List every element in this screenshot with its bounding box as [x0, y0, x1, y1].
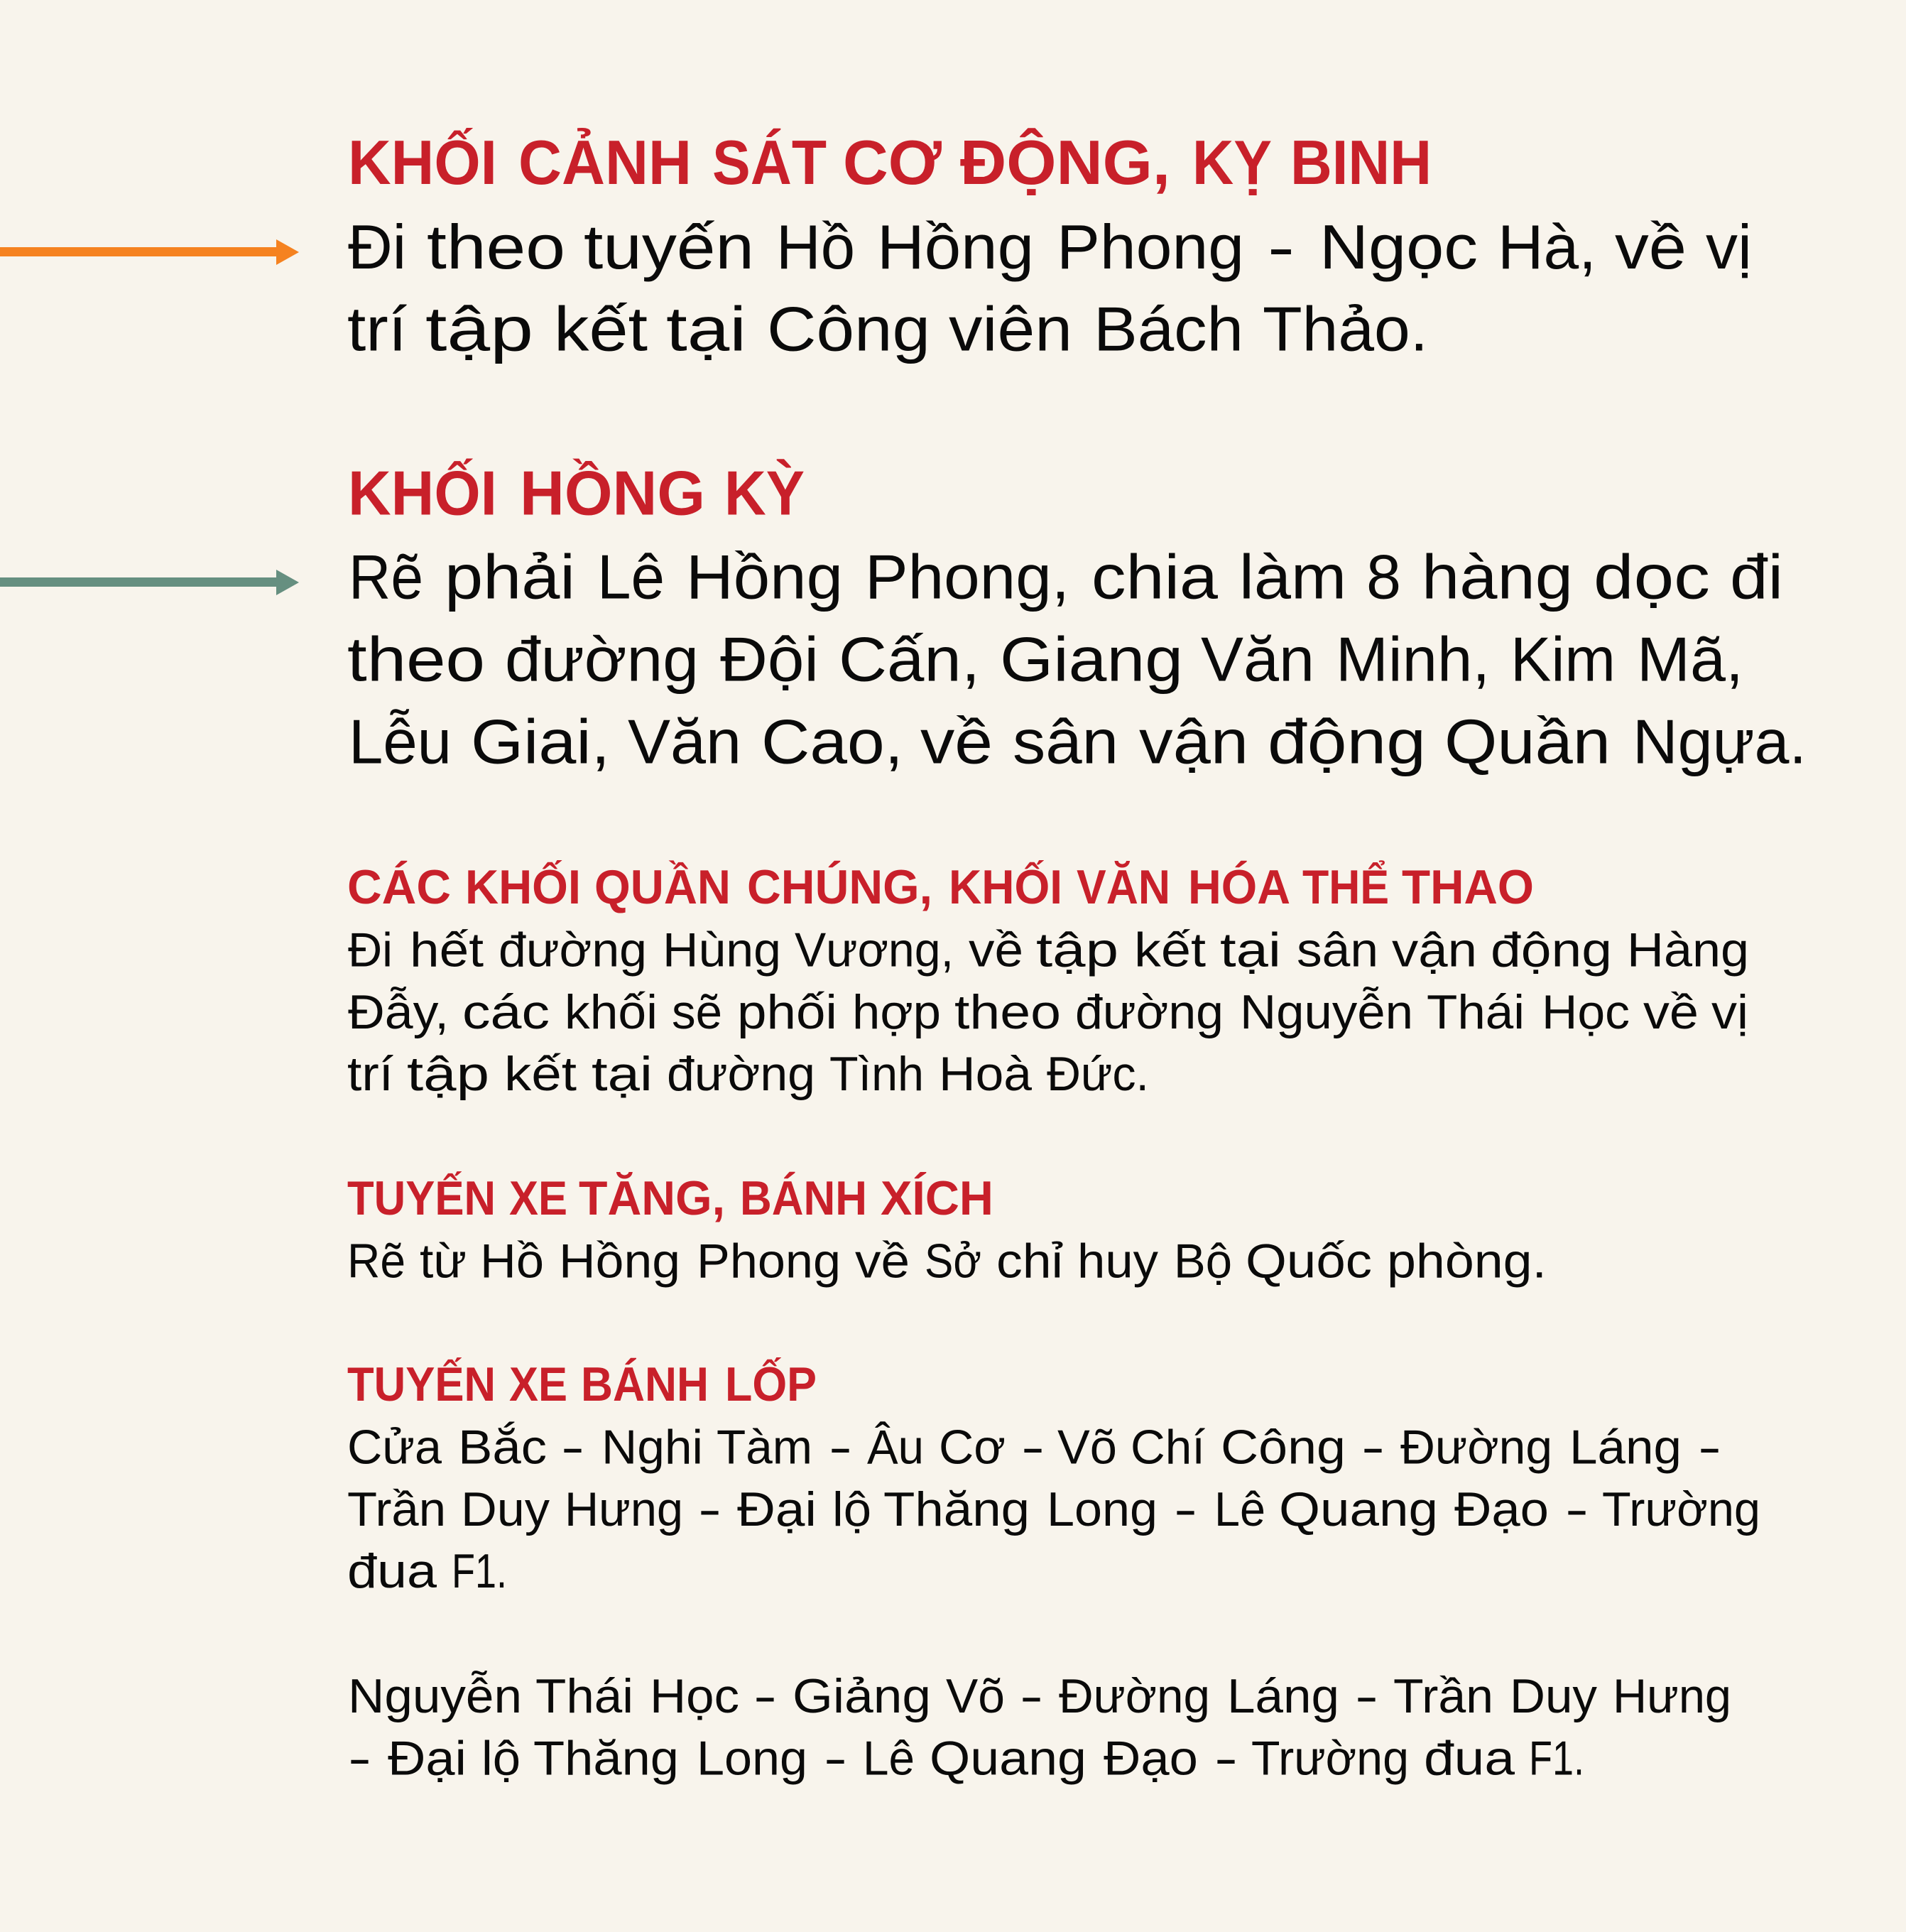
- body line 1: đường: [499, 923, 647, 977]
- body line 1: hết: [410, 923, 484, 977]
- text block: Tuyến xe tăng, bánh xích: [347, 1171, 1547, 1288]
- heading: Các khối quần chúng: THỂ: [1302, 859, 1389, 914]
- route 1 line 3: F1.: [452, 1544, 507, 1598]
- route 1 line 1: -: [1698, 1421, 1721, 1475]
- body line 1: phải: [445, 541, 575, 612]
- route 2 line 2: -: [824, 1732, 847, 1786]
- heading: Các khối quần chúng: QUẦN: [594, 859, 731, 914]
- heading: Khối Cảnh sát cơ động: BINH: [1290, 127, 1432, 197]
- body line 1: Đi: [348, 923, 393, 977]
- body line 2: viên: [949, 294, 1072, 364]
- body line 3: động: [1268, 706, 1426, 777]
- heading: Khối Cảnh sát cơ động: CƠ: [843, 127, 942, 197]
- body line 1: Hồng: [686, 541, 843, 612]
- body line: về: [855, 1234, 910, 1288]
- body line 1: về: [1615, 212, 1687, 282]
- body line 3: [347, 1047, 1149, 1101]
- route 1 line 2: Lê: [1214, 1482, 1265, 1536]
- route 2 line 2: Long: [697, 1732, 807, 1786]
- route 1 line 2: Hưng: [565, 1482, 683, 1536]
- body line 3: về: [920, 706, 993, 777]
- route 1 line 1: -: [1021, 1421, 1045, 1475]
- body line: Rẽ: [347, 1234, 405, 1288]
- body line 1: Hùng: [663, 923, 781, 977]
- heading: Khối Hồng kỳ: [348, 457, 805, 528]
- body line 1: Hồng: [877, 212, 1034, 282]
- route 1 line 2: Duy: [461, 1482, 550, 1536]
- route 1 line 1: Nghi: [601, 1421, 703, 1475]
- body line 3: Lễu: [349, 706, 452, 777]
- body line 2: Kim: [1510, 624, 1616, 695]
- heading: Các khối quần chúng: KHỐI: [465, 859, 581, 914]
- route 2 line 2: Thăng: [533, 1732, 679, 1786]
- body line 2: phối: [737, 985, 837, 1039]
- body line 3: kết: [504, 1047, 577, 1101]
- body line 1: tại: [1220, 923, 1281, 977]
- body line 2: Mã,: [1637, 624, 1743, 695]
- body line 2: theo: [347, 624, 485, 695]
- route 1 line 2: -: [1565, 1482, 1589, 1536]
- body line 1: kết: [1134, 923, 1206, 977]
- route 2 line 2: -: [1214, 1732, 1238, 1786]
- body line 3: Cao,: [761, 706, 903, 777]
- text block: Khối Hồng kỳ: [347, 457, 1807, 777]
- route 1 line 1: -: [1361, 1421, 1385, 1475]
- route 2 line 1: [348, 1669, 1731, 1723]
- body line 2: về: [1643, 985, 1699, 1039]
- body line 2: hợp: [852, 985, 941, 1039]
- route 1 line 2: Trần: [347, 1482, 446, 1536]
- body line 2: [347, 624, 1743, 695]
- body line: huy: [1077, 1234, 1158, 1288]
- heading: Khối Cảnh sát cơ động: KHỐI: [348, 127, 497, 197]
- body line 1: Hàng: [1627, 923, 1749, 977]
- route 1 line 1: [347, 1421, 1721, 1475]
- route 1 line 1: Bắc: [458, 1421, 547, 1475]
- heading: Các khối quần chúng: VĂN: [1077, 860, 1170, 914]
- heading: Các khối quần chúng: CHÚNG,: [747, 860, 932, 914]
- body line 1: làm: [1239, 541, 1346, 612]
- heading: Khối Cảnh sát cơ động: SÁT: [712, 127, 827, 197]
- body line 3: vận: [1139, 706, 1248, 777]
- body line 2: Văn: [1201, 624, 1314, 695]
- body line 3: Đức.: [1047, 1047, 1149, 1101]
- body line 1: dọc: [1594, 541, 1710, 612]
- body line 1: theo: [427, 212, 565, 282]
- body line 1: đi: [1730, 541, 1783, 612]
- body line 3: Quần: [1444, 706, 1611, 777]
- body line 2: đường: [1075, 985, 1224, 1039]
- body line 3: Ngựa.: [1633, 706, 1807, 777]
- route 1 line 1: -: [829, 1421, 852, 1475]
- body line 1: hàng: [1422, 541, 1573, 612]
- body line 1: [349, 541, 1783, 612]
- route 1 line 2: Đạo: [1454, 1482, 1549, 1536]
- route 1 line 1: Đường: [1400, 1421, 1552, 1475]
- body line 1: [348, 923, 1749, 977]
- body line 2: tại: [666, 294, 746, 364]
- body line: Hồng: [559, 1234, 680, 1288]
- route 2 line 1: Hưng: [1613, 1669, 1731, 1723]
- heading: Các khối quần chúng: KHỐI: [949, 859, 1062, 914]
- heading: Các khối quần chúng: HÓA: [1188, 860, 1290, 914]
- body line 1: Hồ: [776, 212, 855, 282]
- body line 1: Vương,: [795, 923, 954, 977]
- route 1 line 3: đua: [347, 1544, 437, 1598]
- route 1 line 1: Võ: [1057, 1421, 1117, 1475]
- body line 2: Học: [1542, 985, 1630, 1039]
- heading: Khối Hồng kỳ: HỒNG: [520, 457, 705, 528]
- route 1 line 2: Thăng: [883, 1482, 1030, 1536]
- body line: Quốc: [1246, 1234, 1372, 1288]
- body line 2: Giang: [1000, 624, 1183, 695]
- route 2 line 1: Học: [650, 1669, 739, 1723]
- route 2 line 2: [348, 1732, 1584, 1786]
- route 2 line 2: Lê: [863, 1732, 915, 1786]
- route 2 line 2: -: [348, 1732, 371, 1786]
- route 1 line 1: Cơ: [939, 1421, 1006, 1475]
- heading: Khối Cảnh sát cơ động: ĐỘNG,: [960, 127, 1170, 197]
- body line 2: vị: [1711, 985, 1748, 1039]
- heading: Tuyến xe bánh lốp: BÁNH: [581, 1357, 709, 1411]
- heading: Tuyến xe bánh lốp: LỐP: [725, 1357, 817, 1411]
- body line 1: -: [1268, 212, 1295, 282]
- body line 1: 8: [1366, 541, 1401, 612]
- route 1 line 1: Âu: [867, 1421, 924, 1475]
- body line 2: theo: [954, 985, 1061, 1039]
- body line 3: tại: [592, 1047, 653, 1101]
- body line 2: trí: [347, 294, 408, 364]
- body line 1: vận: [1392, 923, 1477, 977]
- route 2 line 2: Trường: [1251, 1732, 1409, 1786]
- heading: Tuyến xe tăng: TĂNG,: [579, 1171, 725, 1225]
- body line 1: Hà,: [1498, 212, 1596, 282]
- arrow: teal route: [0, 570, 299, 595]
- route 1 line 1: Công: [1221, 1421, 1346, 1475]
- body line 3: đường: [667, 1047, 815, 1101]
- text block: Khối Cảnh sát cơ động, Kỵ binh: [347, 127, 1752, 364]
- body line 3: Văn: [628, 706, 741, 777]
- body line 2: kết: [554, 294, 648, 364]
- body line 1: Ngọc: [1319, 212, 1478, 282]
- route 1 line 2: [347, 1482, 1760, 1536]
- body line 2: [348, 985, 1748, 1039]
- body line: Phong: [697, 1234, 841, 1288]
- route 1 line 1: -: [561, 1421, 584, 1475]
- route 1 line 2: -: [698, 1482, 721, 1536]
- heading: Tuyến xe tăng: XÍCH: [881, 1171, 993, 1225]
- body line 1: [348, 212, 1752, 282]
- heading: Tuyến xe bánh lốp: XE: [509, 1357, 567, 1411]
- route 2 line 1: Võ: [946, 1669, 1005, 1723]
- body line: Sở: [925, 1234, 981, 1288]
- body line 2: Bách: [1094, 294, 1243, 364]
- body line 2: tập: [425, 294, 533, 364]
- body line 1: Phong,: [865, 541, 1069, 612]
- body line 3: Hoà: [939, 1047, 1032, 1101]
- route 2 line 1: Đường: [1059, 1669, 1210, 1723]
- route 2 line 1: Giảng: [793, 1669, 931, 1723]
- heading: Các khối quần chúng: CÁC: [347, 860, 451, 914]
- route 2 line 1: -: [1355, 1669, 1378, 1723]
- body line 3: trí: [347, 1047, 393, 1101]
- body line: Bộ: [1174, 1234, 1232, 1288]
- route 2 line 2: Đạo: [1104, 1732, 1198, 1786]
- heading: Khối Cảnh sát cơ động: CẢNH: [518, 127, 692, 197]
- body line 1: Rẽ: [349, 541, 423, 612]
- body line: [347, 1234, 1547, 1288]
- body line: Hồ: [480, 1234, 544, 1288]
- body line: chỉ: [996, 1234, 1063, 1288]
- heading: Tuyến xe bánh lốp: [347, 1357, 817, 1411]
- route 1 line 2: lộ: [832, 1482, 871, 1536]
- body line 2: Nguyễn: [1240, 985, 1413, 1039]
- route 2 line 1: Nguyễn: [348, 1669, 522, 1723]
- heading: Tuyến xe tăng: TUYẾN: [347, 1171, 496, 1225]
- body line 1: Đi: [348, 212, 406, 282]
- route 2 line 1: Thái: [535, 1669, 633, 1723]
- body line 3: [349, 706, 1807, 777]
- text block: Các khối quần chúng: [347, 859, 1749, 1101]
- heading: Tuyến xe bánh lốp: TUYẾN: [347, 1357, 496, 1411]
- heading: Khối Hồng kỳ: KỲ: [724, 457, 805, 528]
- heading: Khối Hồng kỳ: KHỐI: [348, 457, 497, 528]
- body line 1: Phong: [1057, 212, 1244, 282]
- body line 1: vị: [1706, 212, 1752, 282]
- body line 2: Đẫy,: [348, 985, 449, 1039]
- body line 2: sẽ: [672, 985, 722, 1039]
- body line: từ: [420, 1234, 467, 1288]
- route 1 line 2: Trường: [1602, 1482, 1760, 1536]
- route 2 line 2: đua: [1424, 1732, 1515, 1786]
- route 1 line 2: -: [1174, 1482, 1197, 1536]
- route 1 line 2: Quang: [1279, 1482, 1438, 1536]
- route 1 line 1: Tàm: [717, 1421, 812, 1475]
- body line: phòng.: [1387, 1234, 1547, 1288]
- route 1 line 3: [347, 1544, 507, 1598]
- body line 2: Thái: [1427, 985, 1525, 1039]
- route 2 line 1: -: [753, 1669, 777, 1723]
- body line 2: Thảo.: [1263, 294, 1428, 364]
- heading: Tuyến xe tăng: BÁNH: [740, 1171, 867, 1225]
- route 2 line 1: -: [1020, 1669, 1043, 1723]
- text block: Tuyến xe bánh lốp: [347, 1357, 1760, 1786]
- body line 1: động: [1491, 923, 1612, 977]
- body line 3: Giai,: [471, 706, 610, 777]
- body line 2: khối: [565, 985, 658, 1039]
- body line 2: Cấn,: [839, 624, 980, 695]
- route 1 line 1: Chí: [1131, 1421, 1205, 1475]
- route 2 line 2: Đại: [388, 1732, 467, 1786]
- body line 2: Công: [767, 294, 930, 364]
- heading: Khối Cảnh sát cơ động: KỴ: [1192, 127, 1272, 197]
- body line 1: Lê: [597, 541, 665, 612]
- body line 1: tập: [1036, 923, 1118, 977]
- route 1 line 1: Cửa: [347, 1421, 442, 1475]
- route 2 line 2: Quang: [930, 1732, 1087, 1786]
- heading: Khối Cảnh sát cơ động: [348, 127, 1432, 197]
- body line 1: chia: [1091, 541, 1218, 612]
- body line 1: tuyến: [584, 212, 754, 282]
- route 2 line 1: Láng: [1227, 1669, 1339, 1723]
- body line 1: sân: [1297, 923, 1378, 977]
- body line 3: tập: [407, 1047, 489, 1101]
- heading: Các khối quần chúng: THAO: [1402, 860, 1534, 914]
- route 1 line 1: Láng: [1569, 1421, 1682, 1475]
- body line 3: sân: [1013, 706, 1118, 777]
- arrow: orange route: [0, 239, 299, 265]
- body line 1: về: [969, 923, 1023, 977]
- body line 3: Tình: [829, 1047, 924, 1101]
- route 2 line 1: Duy: [1510, 1669, 1597, 1723]
- heading: Các khối quần chúng: [347, 859, 1534, 914]
- heading: Tuyến xe tăng: [347, 1171, 993, 1225]
- route 1 line 2: Đại: [737, 1482, 817, 1536]
- body line 2: các: [462, 985, 550, 1039]
- route 2 line 1: Trần: [1393, 1669, 1493, 1723]
- body line 2: đường: [505, 624, 699, 695]
- body line 2: [347, 294, 1428, 364]
- route 2 line 2: F1.: [1529, 1732, 1584, 1786]
- body line 2: Minh,: [1336, 624, 1490, 695]
- route 2 line 2: lộ: [481, 1732, 521, 1786]
- body line 2: Đội: [720, 624, 819, 695]
- route 1 line 2: Long: [1047, 1482, 1158, 1536]
- heading: Tuyến xe tăng: XE: [509, 1171, 567, 1225]
